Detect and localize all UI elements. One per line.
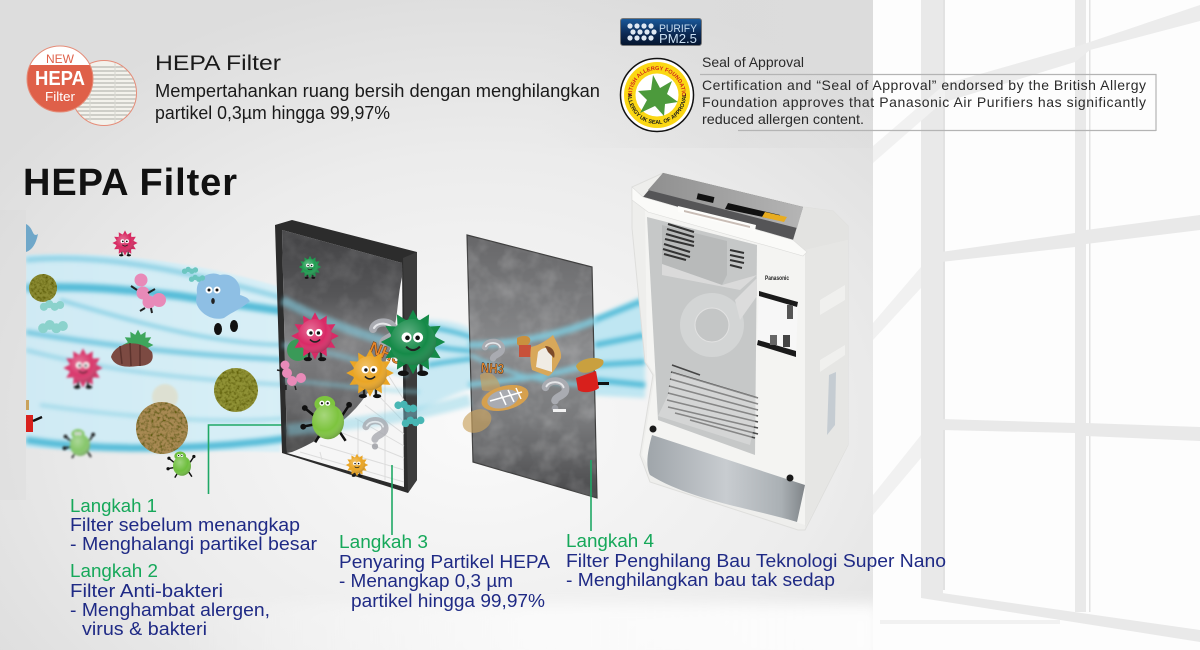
- faded odour: [480, 373, 500, 391]
- heading: HEPA Filter intro: partikel 0,3µm hingga 99,97%: [155, 103, 390, 123]
- heading: HEPA Filter title: HEPA Filter: [23, 162, 237, 204]
- teal molecules: [38, 300, 68, 333]
- faded fish: [459, 405, 495, 437]
- text block: steps 1 and 2: virus & bakteri: [82, 618, 207, 639]
- filter 2: super nano deodorising filter: [467, 235, 597, 498]
- text block: step 4: [566, 530, 946, 590]
- purifier body: [632, 173, 848, 530]
- brown flea: [111, 343, 153, 367]
- blurred red germ: [63, 348, 103, 389]
- particles on filter 1: [277, 256, 445, 477]
- icon: red HEPA circle: Filter: [45, 90, 75, 104]
- lower grille: [667, 365, 758, 438]
- text block: seal of approval: Seal of Approval: [702, 54, 804, 70]
- control panel: [632, 173, 807, 256]
- pink worm germ: [131, 274, 166, 313]
- text block: step 3: [339, 531, 551, 611]
- text block: step 3: Penyaring Partikel HEPA: [339, 551, 551, 572]
- background: window frame: [873, 0, 1200, 642]
- step 1 leader line: [208, 425, 287, 494]
- airflow stream through filters: [282, 300, 596, 430]
- airflow stream behind filters: [26, 254, 645, 452]
- question mark particle: [373, 322, 394, 354]
- text block: steps 1 and 2: Langkah 2: [70, 560, 158, 581]
- icon: red HEPA circle: HEPA: [35, 68, 85, 90]
- text block: seal of approval: [700, 54, 1156, 131]
- step 3 leader line: [391, 465, 393, 535]
- side window: [827, 372, 836, 435]
- fish bone odour: [479, 381, 531, 415]
- icon: red HEPA circle: NEW: [46, 52, 75, 66]
- green bug large: [300, 396, 352, 442]
- green germ behind: [287, 339, 309, 361]
- text block: step 3: - Menangkap 0,3 µm: [339, 570, 513, 591]
- red pot with smell: [576, 358, 609, 392]
- question mark with cigarette: [366, 421, 385, 450]
- upper grille: [663, 224, 744, 268]
- NH3 label: NH3: [367, 338, 405, 368]
- text block: steps 1 and 2: - Menghambat alergen,: [70, 599, 270, 620]
- text block: step 3: partikel hingga 99,97%: [351, 590, 545, 611]
- heading: HEPA Filter intro: Mempertahankan ruang bersih dengan menghilangkan: [155, 81, 600, 101]
- yellow germ: [346, 349, 394, 398]
- small yellow germ: [346, 454, 368, 477]
- green bug small: [166, 452, 196, 478]
- text block: step 4: Langkah 4: [566, 530, 654, 551]
- icon: British Allergy Foundation seal: [620, 58, 694, 132]
- cigarette: [553, 409, 566, 412]
- pink germ: [291, 312, 339, 361]
- teal molecules: [393, 398, 425, 428]
- particles on filter 2: [459, 335, 609, 437]
- icon: pleated filter disc: [70, 60, 138, 126]
- instruction label: [757, 291, 798, 357]
- dog odour: [530, 335, 561, 376]
- heading: HEPA Filter intro: HEPA Filter: [155, 52, 281, 75]
- question mark: [485, 342, 502, 368]
- text block: steps 1 and 2: Filter Anti-bakteri: [70, 580, 223, 601]
- icon: Purify PM2.5 badge: [620, 18, 702, 46]
- heading: HEPA Filter intro: [155, 52, 600, 123]
- blue cloud germ: [182, 267, 250, 335]
- icon: new HEPA filter badge: [26, 45, 138, 126]
- olive pollen large: [214, 368, 258, 412]
- icon: Purify PM2.5 badge: PURIFY: [659, 23, 698, 35]
- silver handle: [647, 435, 805, 522]
- filter cavity: [647, 217, 757, 455]
- particles before filters: [26, 224, 258, 478]
- brand text: Panasonic: [765, 275, 789, 282]
- dust layer peeling off: [282, 230, 402, 455]
- text block: seal of approval: reduced allergen content.: [702, 111, 864, 127]
- green germ behind flea: [123, 330, 153, 360]
- pleats of HEPA filter: [300, 340, 404, 482]
- text block: step 4: - Menghilangkan bau tak sedap: [566, 569, 835, 590]
- big green germ: [381, 310, 445, 376]
- blurred green bug: [63, 429, 95, 458]
- green germ top: [299, 256, 321, 279]
- step 4 leader line: [590, 460, 592, 531]
- question mark with cigarette: [546, 381, 566, 412]
- filter 1: pre-filter and HEPA frame: [275, 220, 417, 493]
- text block: step 3: Langkah 3: [339, 531, 428, 552]
- text block: steps 1 and 2: [70, 495, 317, 639]
- fan plate: [680, 278, 757, 357]
- air purifier: [632, 173, 848, 530]
- red germ small: [112, 230, 138, 256]
- text block: steps 1 and 2: - Menghalangi partikel besar: [70, 533, 317, 554]
- cut-off blue cloud: [26, 224, 38, 252]
- text block: seal of approval: Certification and “Seal of Approval” endorsed by the British Allergy: [702, 77, 1146, 93]
- red pot with smell, far: [517, 336, 531, 357]
- ghost particles: [152, 384, 178, 410]
- icon: British Allergy Foundation seal: ALLERGY UK SEAL OF APPROVAL: [628, 94, 686, 124]
- olive pollen left: [29, 274, 57, 302]
- pink worm: [277, 360, 306, 390]
- icon: red HEPA circle: [26, 45, 96, 112]
- text block: seal of approval: Foundation approves that Panasonic Air Purifiers has significantly: [702, 94, 1146, 110]
- text block: step 4: Filter Penghilang Bau Teknologi Super Nano: [566, 550, 946, 571]
- NH3 odour label: NH3: [480, 359, 505, 377]
- text block: steps 1 and 2: Langkah 1: [70, 495, 157, 516]
- red pot cut-off: [26, 400, 42, 432]
- brown pollen large: [136, 402, 188, 454]
- icon: Purify PM2.5 badge: PM2.5: [659, 31, 697, 46]
- text block: steps 1 and 2: Filter sebelum menangkap: [70, 514, 300, 535]
